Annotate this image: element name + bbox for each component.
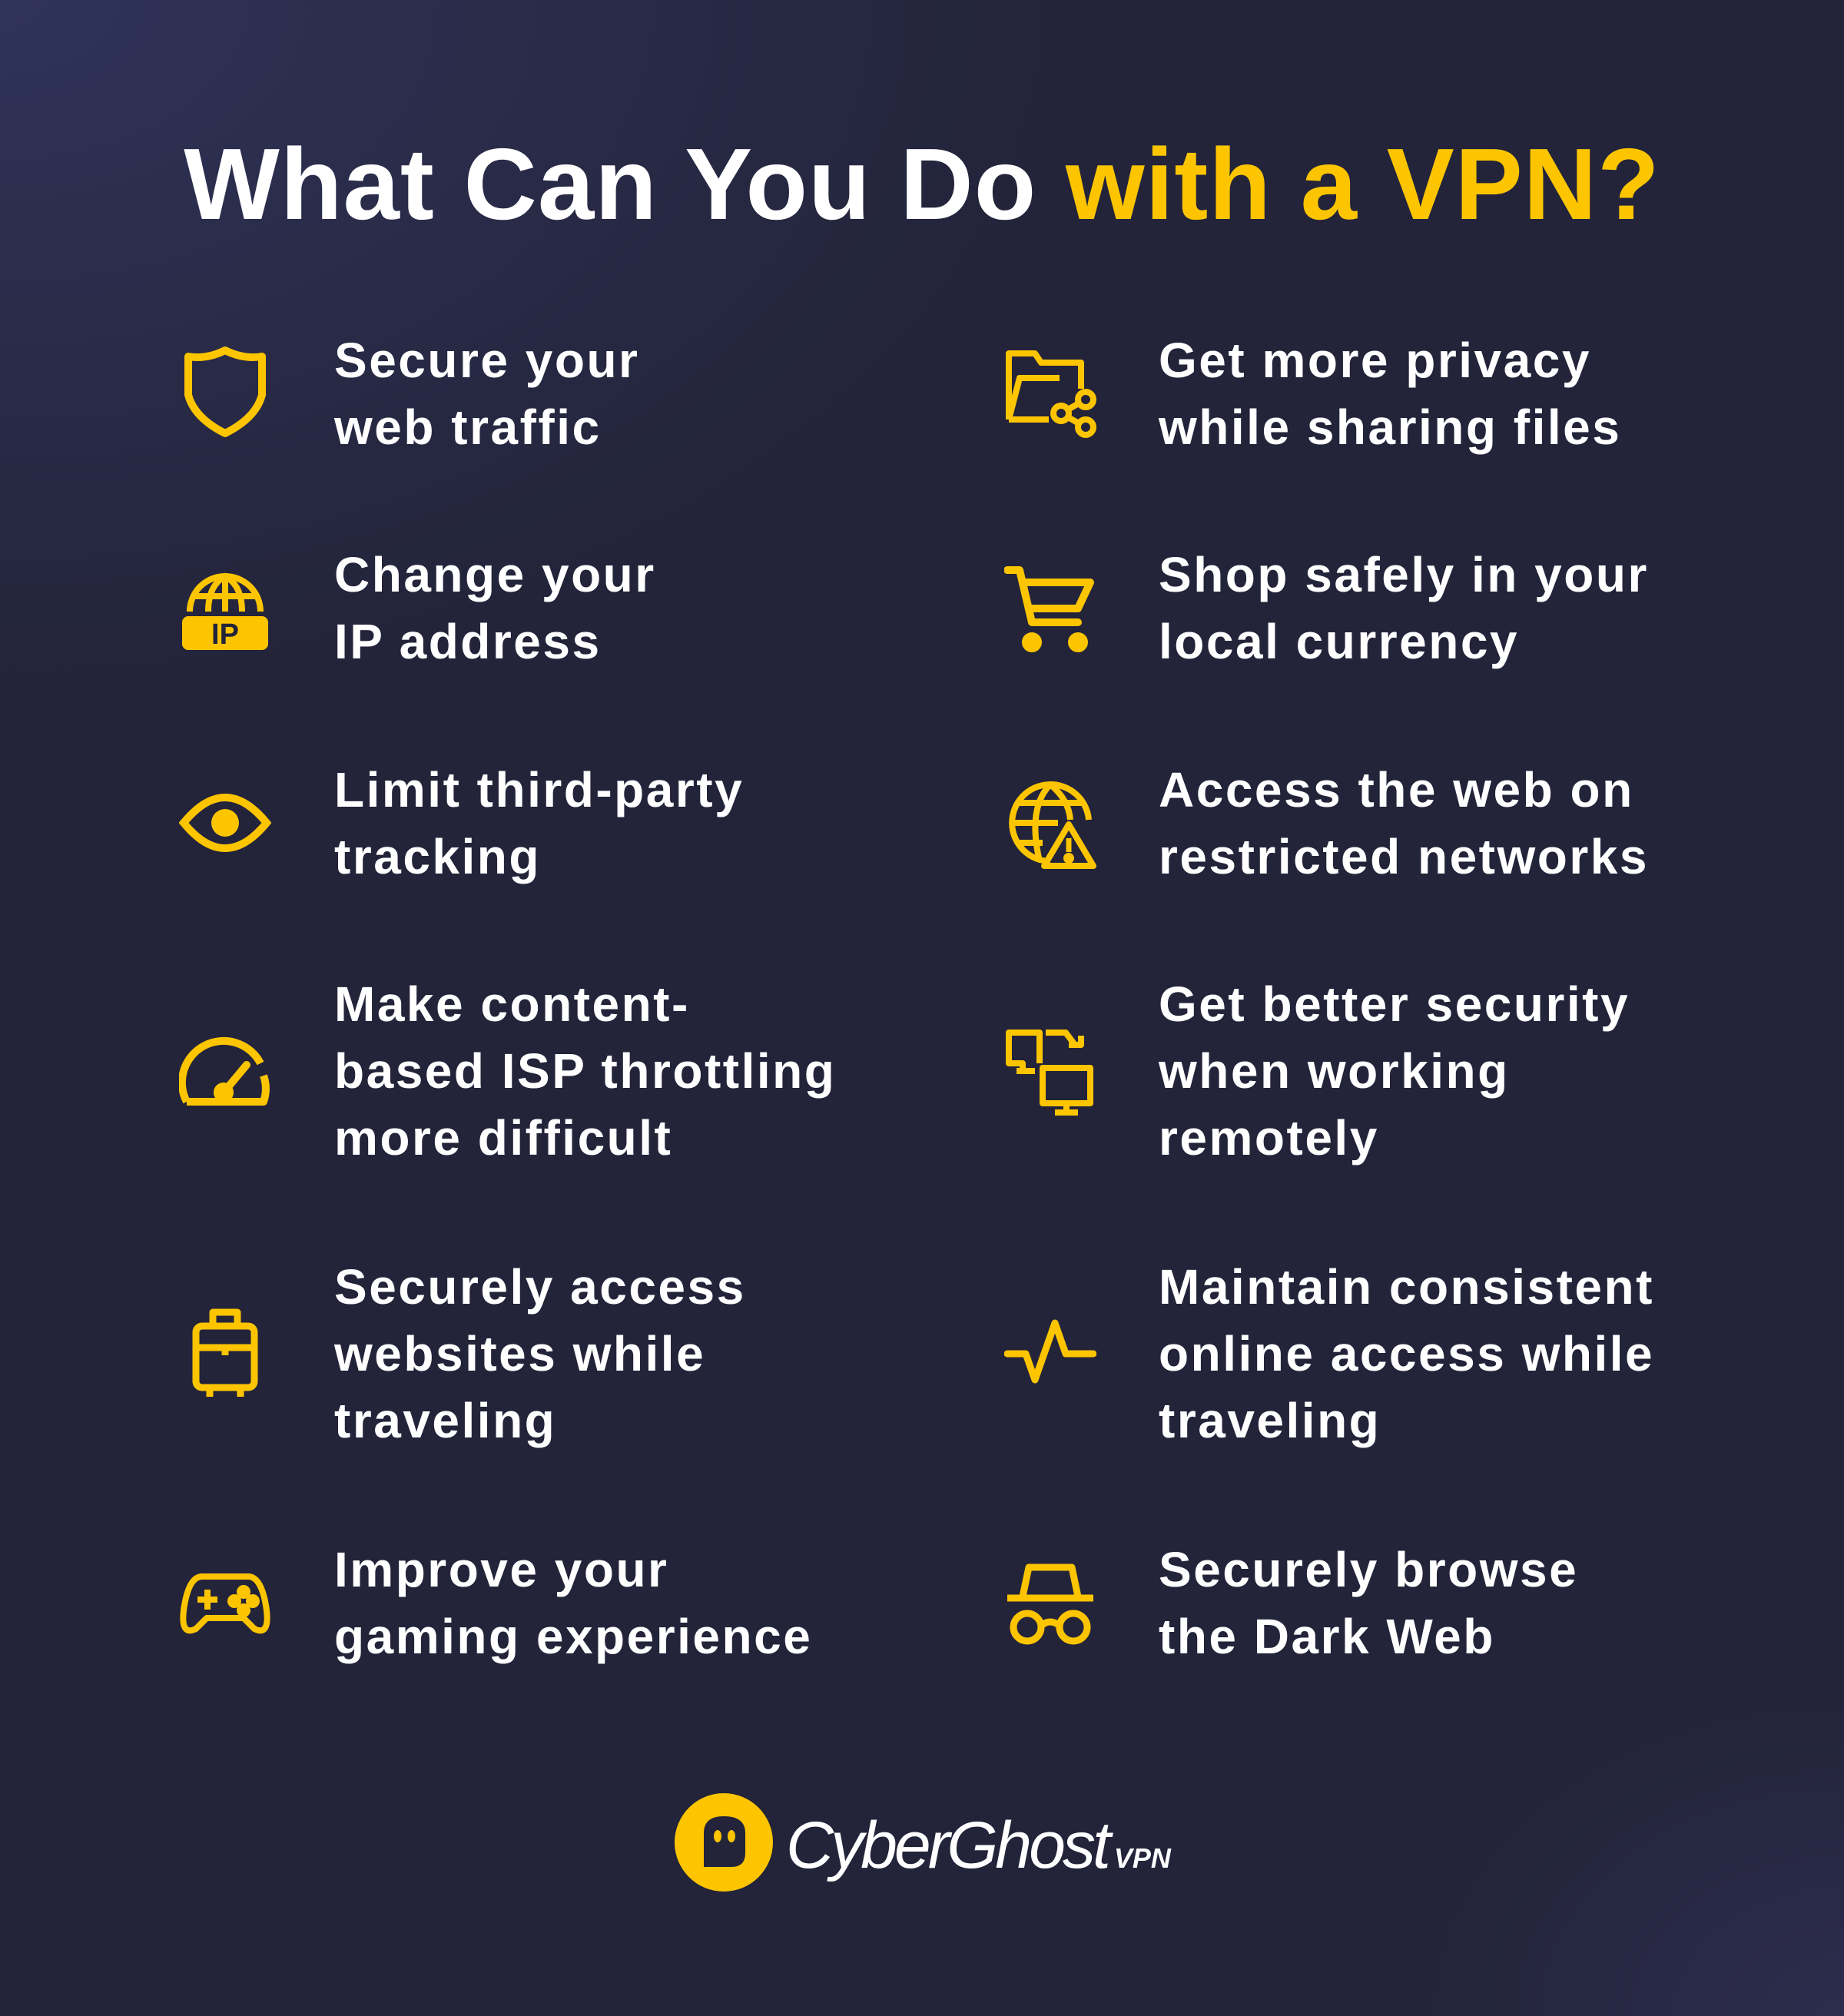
- text: dark web: [1159, 1542, 1578, 1664]
- text: change ip: Change your: [334, 547, 656, 602]
- text: secure web traffic: [333, 333, 639, 455]
- text: restricted networks: [1159, 762, 1649, 884]
- icon: remote screens: [1006, 1030, 1093, 1116]
- icon: shield: [184, 346, 266, 437]
- icon: incognito: [1007, 1564, 1093, 1644]
- icon: ghost circle: [675, 1793, 773, 1892]
- icon: pulse: [1004, 1320, 1096, 1383]
- icon: globe warning: [1009, 781, 1096, 869]
- text: limit tracking: tracking: [334, 829, 541, 884]
- icon: gamepad: [180, 1573, 270, 1633]
- text: privacy sharing files: [1159, 333, 1621, 455]
- text: remote security: [1159, 976, 1630, 1166]
- text: isp throttling: Make content-: [334, 976, 690, 1032]
- text: remote security: Get better security: [1159, 976, 1630, 1032]
- icon: folder share: [1006, 350, 1096, 438]
- text: dark web: Securely browse: [1159, 1542, 1578, 1597]
- icon: IP globe: [182, 573, 268, 651]
- text: consistent access: Maintain consistent: [1159, 1259, 1654, 1315]
- text: privacy sharing files: while sharing files: [1159, 400, 1621, 455]
- text: isp throttling: more difficult: [334, 1110, 672, 1166]
- title: What Can You Do with a VPN?: [184, 128, 1660, 240]
- text: restricted networks: restricted networks: [1159, 829, 1649, 884]
- text: remote security: remotely: [1159, 1110, 1379, 1166]
- text: remote security: when working: [1159, 1043, 1510, 1099]
- text: isp throttling: [334, 976, 836, 1166]
- text: gaming: gaming experience: [334, 1609, 812, 1664]
- text: consistent access: online access while: [1159, 1326, 1654, 1381]
- text: consistent access: [1159, 1259, 1654, 1448]
- text: gaming: Improve your: [334, 1542, 668, 1597]
- text: secure web traffic: Secure your: [334, 333, 639, 388]
- text: traveling access: traveling: [334, 1393, 556, 1448]
- text: change ip: [334, 547, 656, 669]
- text: consistent access: traveling: [1159, 1393, 1381, 1448]
- icon: eye: [179, 794, 271, 852]
- icon: luggage: [192, 1309, 258, 1397]
- text: shop safely: [1159, 547, 1649, 669]
- text: traveling access: [333, 1259, 746, 1448]
- text: change ip: IP address: [334, 614, 602, 669]
- text: isp throttling: based ISP throttling: [334, 1043, 836, 1099]
- text: limit tracking: Limit third-party: [334, 762, 744, 817]
- text: privacy sharing files: Get more privacy: [1159, 333, 1591, 388]
- icon: cart: [1004, 566, 1094, 652]
- text: gaming: [334, 1542, 812, 1664]
- icon: speedometer: [179, 1037, 270, 1106]
- text: traveling access: websites while: [334, 1326, 705, 1381]
- text: traveling access: Securely access: [334, 1259, 746, 1315]
- icon: IP globe: IP: [211, 618, 239, 651]
- text: brand name: CyberGhostVPN: [786, 1809, 1171, 1882]
- text: shop safely: local currency: [1159, 614, 1519, 669]
- text: restricted networks: Access the web on: [1159, 762, 1634, 817]
- text: limit tracking: [334, 762, 744, 884]
- text: secure web traffic: web traffic: [334, 400, 602, 455]
- text: shop safely: Shop safely in your: [1159, 547, 1649, 602]
- logo: CyberGhost VPN: [675, 1793, 1171, 1892]
- text: dark web: the Dark Web: [1159, 1609, 1495, 1664]
